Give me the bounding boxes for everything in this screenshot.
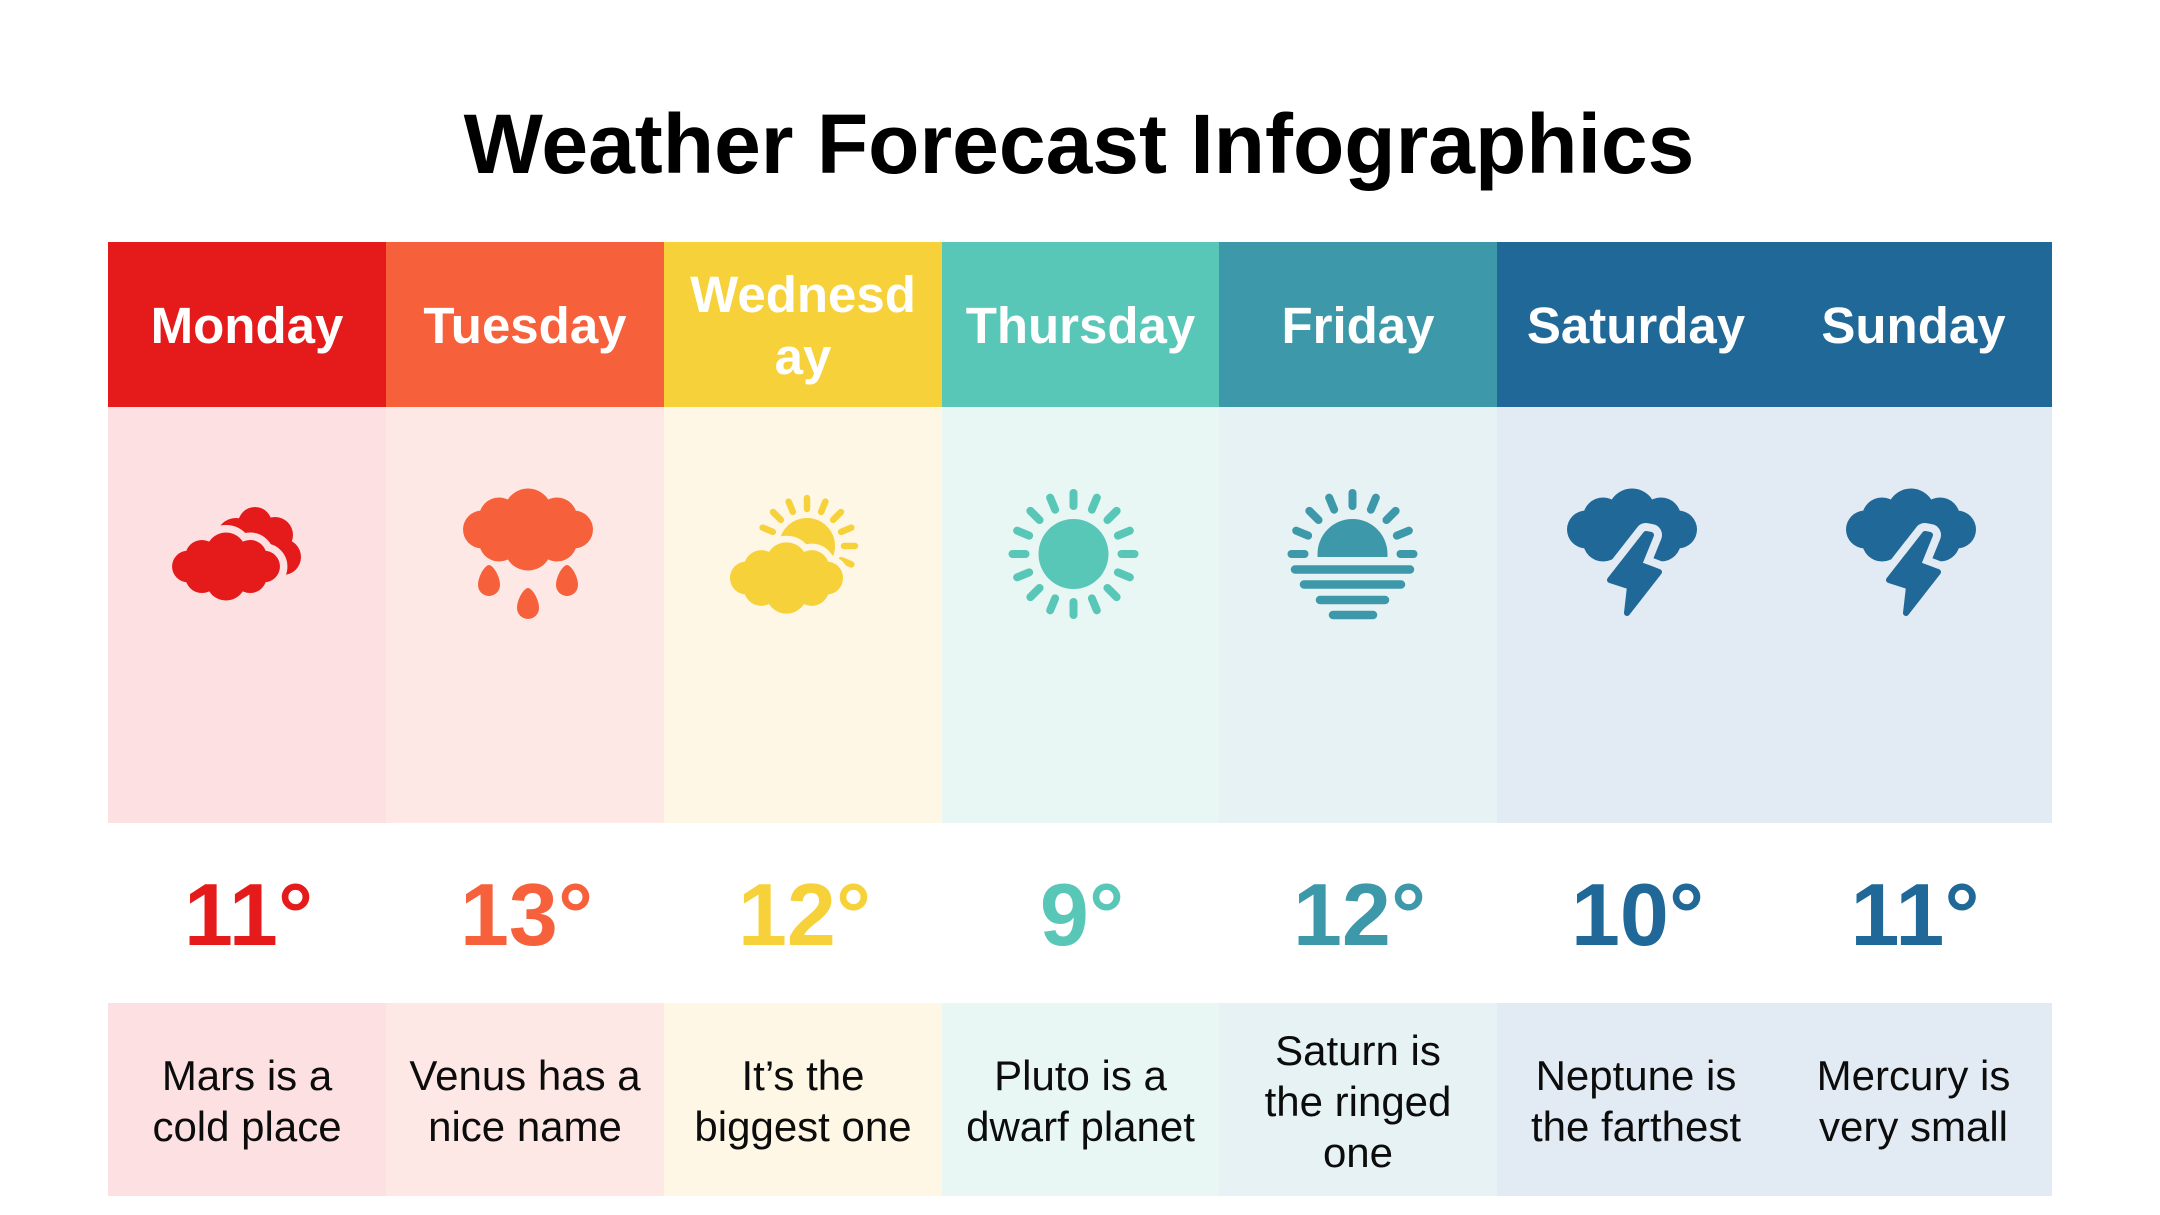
description: Friday: one (1323, 1128, 1393, 1176)
panel: Sunday icon background (1775, 407, 2052, 823)
description: Wednesday: It’s the (742, 1052, 864, 1099)
description: Saturday (1497, 1003, 1775, 1196)
header: Wednesday (664, 242, 942, 407)
temperature: Wednesday: 12° (738, 865, 871, 964)
icon: Tuesday rain cloud (463, 488, 593, 619)
panel: Wednesday icon background (664, 407, 942, 823)
temperature: Saturday: 10° (1571, 865, 1704, 964)
header: Sunday: Sunday (1821, 296, 2006, 354)
icon: Wednesday sun behind cloud (730, 494, 858, 614)
icon: Thursday sun (1008, 489, 1138, 619)
description: Thursday: Pluto is a (994, 1052, 1167, 1099)
temperature: Monday: 11° (184, 865, 313, 964)
description: Wednesday: biggest one (694, 1103, 912, 1150)
description: Friday (1219, 1003, 1497, 1196)
description: Tuesday: Venus has a (409, 1052, 641, 1099)
description: Tuesday: nice name (428, 1103, 622, 1150)
temperature: Friday: 12° (1293, 865, 1426, 964)
description: Monday: Mars is a (162, 1052, 332, 1099)
panel: Thursday icon background (942, 407, 1219, 823)
header: Sunday (1775, 242, 2052, 407)
description: Tuesday (386, 1003, 664, 1196)
description: Saturday: Neptune is (1536, 1052, 1736, 1099)
description: Sunday (1775, 1003, 2052, 1196)
panel: Tuesday icon background (386, 407, 664, 823)
description: Sunday: very small (1819, 1103, 2008, 1150)
description: Monday (108, 1003, 386, 1196)
description: Thursday: dwarf planet (966, 1103, 1195, 1150)
header: Tuesday (386, 242, 664, 407)
temperature: Thursday: 9° (1040, 865, 1124, 964)
title: Weather Forecast Infographics (464, 97, 1694, 191)
header: Monday (108, 242, 386, 407)
panel: Monday icon background (108, 407, 386, 823)
icon: Saturday storm cloud (1567, 488, 1697, 616)
icon: Friday sunset (1288, 489, 1418, 620)
description: Saturday: the farthest (1531, 1103, 1741, 1150)
panel: Friday icon background (1219, 407, 1497, 823)
description: Thursday (942, 1003, 1219, 1196)
header: Monday: Monday (151, 296, 343, 354)
header: Thursday (942, 242, 1219, 407)
header: Saturday: Saturday (1527, 296, 1745, 354)
description: Sunday: Mercury is (1817, 1052, 2010, 1099)
description: Wednesday (664, 1003, 942, 1196)
header: Friday: Friday (1281, 296, 1435, 354)
description: Friday: the ringed (1265, 1078, 1451, 1124)
temperature: Tuesday: 13° (460, 865, 593, 964)
description: Monday: cold place (152, 1103, 342, 1150)
description: Friday: Saturn is (1275, 1026, 1441, 1074)
header: Saturday (1497, 242, 1775, 407)
temperature: Sunday: 11° (1850, 865, 1980, 964)
header: Wednesday: Wednesd (690, 266, 916, 322)
icon: Sunday storm cloud (1846, 488, 1976, 616)
header: Thursday: Thursday (966, 296, 1195, 354)
header: Friday (1219, 242, 1497, 407)
header: Tuesday: Tuesday (423, 296, 627, 354)
icon: Monday clouds (172, 507, 301, 600)
header: Wednesday: ay (775, 328, 831, 384)
panel: Saturday icon background (1497, 407, 1775, 823)
